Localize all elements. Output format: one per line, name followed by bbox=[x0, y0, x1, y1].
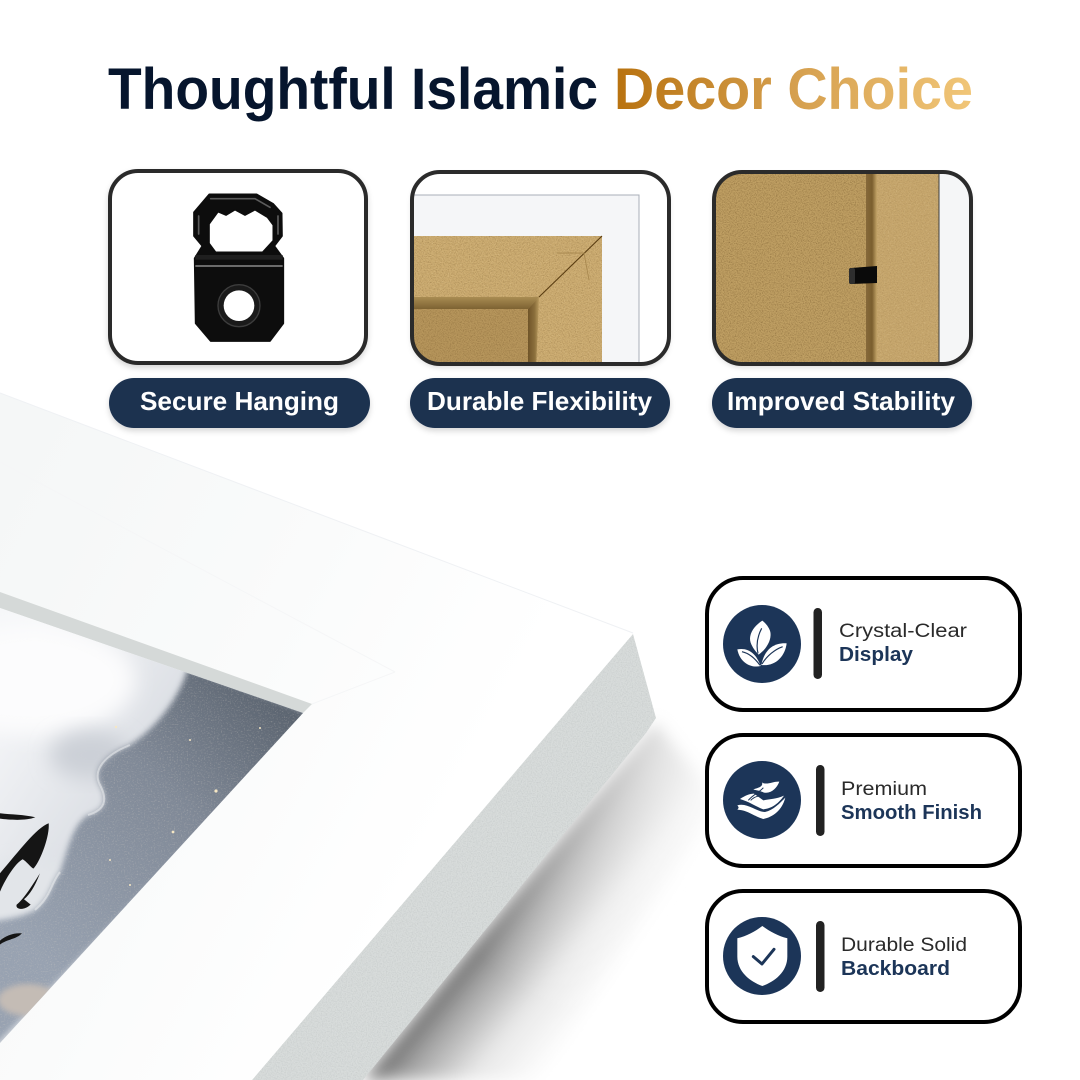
miter cut bbox=[539, 236, 602, 297]
divider bar bbox=[816, 921, 824, 992]
title bbox=[108, 57, 973, 122]
frame front face bbox=[0, 393, 633, 1080]
artwork inside frame bbox=[0, 608, 303, 1043]
panel: secure hanging bbox=[109, 171, 370, 428]
icon: leaves bbox=[723, 605, 801, 683]
thumbnail: hanger bbox=[110, 171, 366, 363]
frame mat seam lines bbox=[0, 462, 395, 704]
mat inner bevel bbox=[0, 592, 312, 713]
thumbnail: frame back corner bbox=[405, 172, 669, 371]
label pill: durable flexibility bbox=[410, 378, 670, 428]
card text: Durable Solid bbox=[841, 935, 967, 956]
label pill: secure hanging: Secure Hanging bbox=[140, 386, 339, 416]
title: Thoughtful Islamic bbox=[108, 57, 598, 122]
black turn clip bbox=[849, 266, 877, 284]
soft cloud highlight bbox=[0, 625, 135, 735]
card text bbox=[841, 935, 967, 980]
card text bbox=[839, 621, 968, 666]
frame outer side face bbox=[250, 630, 660, 1080]
thumbnail: back board with clip bbox=[710, 168, 974, 368]
card text: Display bbox=[839, 644, 914, 666]
gold highlights bbox=[109, 726, 261, 886]
board step shadow bbox=[866, 168, 877, 368]
card text: Backboard bbox=[841, 958, 950, 980]
marble sky background bbox=[0, 600, 310, 1050]
panel: durable flexibility bbox=[405, 172, 670, 428]
label pill: durable flexibility: Durable Flexibility bbox=[427, 386, 653, 416]
panel: improved stability bbox=[710, 168, 974, 428]
inner board bbox=[414, 309, 528, 362]
recess shadow horizontal bbox=[405, 297, 539, 309]
label pill: improved stability: Improved Stability bbox=[727, 386, 956, 416]
divider bar bbox=[814, 608, 822, 679]
grey cloud swirl bbox=[50, 731, 130, 779]
icon: black sawtooth hanger bbox=[194, 194, 283, 341]
fibreboard back bbox=[710, 168, 939, 368]
pale lower wave bbox=[0, 860, 80, 920]
card: premium smooth finish bbox=[707, 735, 1020, 866]
label pill: secure hanging bbox=[109, 378, 370, 428]
card text: Premium bbox=[841, 779, 927, 800]
icon: smooth layers and leaf bbox=[723, 761, 801, 839]
recess shadow vertical bbox=[528, 298, 539, 362]
warm lower marble patch bbox=[0, 984, 58, 1016]
divider bar bbox=[816, 765, 824, 836]
card text bbox=[841, 779, 982, 824]
card: crystal-clear display bbox=[707, 578, 1020, 710]
frame cast shadow bbox=[363, 640, 830, 1080]
scratch marks bbox=[557, 253, 589, 280]
white frame strip bbox=[940, 174, 969, 362]
card text: Smooth Finish bbox=[841, 802, 982, 824]
frame top edge hairline bbox=[0, 393, 633, 633]
white mat bbox=[405, 195, 639, 370]
card text: Crystal-Clear bbox=[839, 621, 968, 642]
label pill: improved stability bbox=[712, 378, 972, 428]
picture frame corner photo bbox=[0, 392, 698, 1080]
fibreboard back bbox=[414, 236, 602, 362]
icon: shield with check bbox=[723, 917, 801, 995]
black calligraphy strokes bbox=[0, 813, 49, 945]
pale swirl veins bbox=[35, 745, 130, 910]
title: Decor Choice bbox=[614, 57, 973, 122]
slate marble area bbox=[0, 672, 303, 1042]
card: durable solid backboard bbox=[707, 891, 1020, 1022]
